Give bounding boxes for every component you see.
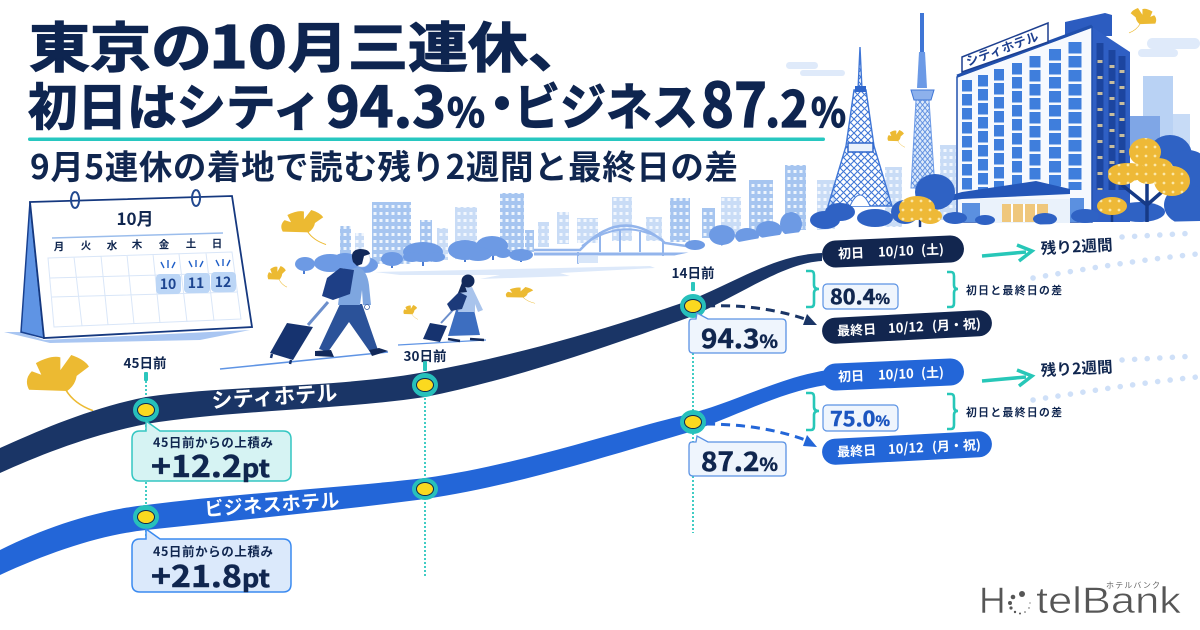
bridge: [534, 226, 700, 264]
title: %: [447, 81, 485, 139]
weekday labels: 土: [186, 236, 197, 251]
traveller: man with suitcase: [220, 249, 388, 369]
title: [28, 1, 846, 145]
highlighted dates: [156, 259, 236, 294]
title: 87: [701, 56, 767, 145]
pill: city first day: (土): [921, 239, 944, 259]
callout: city hotel gain: 45日前からの上積み: [153, 432, 273, 451]
dotted continuation lines: [1033, 233, 1197, 400]
pill: city first day: 初日: [838, 242, 864, 262]
callout: city 94.3%: [689, 313, 786, 356]
logo: HotelBank: telBank: [1036, 580, 1182, 621]
pill: business last day: 10/12: [888, 437, 924, 458]
callout: city hotel gain: +12.2 pt: [151, 442, 270, 486]
golden ginkgo tree small left: [898, 196, 942, 228]
pill: city last day: 10/12: [888, 316, 924, 337]
background clouds: [786, 38, 1200, 76]
golden ginkgo tree small right: [1097, 197, 1127, 222]
brace and gap: business: 75.0%: [830, 403, 891, 432]
pill: business last day: [821, 431, 993, 465]
callout: city 94.3%: 94.3%: [701, 319, 778, 356]
timeline labels: 30日前: [404, 345, 446, 365]
title: .2: [765, 70, 808, 142]
logo: HotelBank: H: [979, 580, 1006, 621]
subtitle: 9月5連休の着地で読む残り2週間と最終日の差: [30, 140, 738, 189]
ribbon: city hotel: [0, 253, 822, 473]
highlighted dates: 11: [188, 273, 204, 293]
ribbon: business hotel: [0, 369, 835, 575]
vertical guide: 30 days before: [423, 361, 427, 576]
weekday labels: 金: [159, 237, 170, 252]
callout: business hotel gain: +21.8 pt: [151, 552, 270, 596]
brace and gap: business: [806, 393, 1062, 432]
trees around the hotel: [810, 135, 1200, 229]
ginkgo leaves: [27, 8, 1156, 411]
timeline labels: 14日前: [672, 262, 714, 282]
ribbon label: city hotel: シティホテル: [211, 377, 338, 415]
callout: business hotel gain: 45日前からの上積み: [153, 541, 273, 560]
weekday labels: 日: [212, 236, 222, 251]
pill: city last day: [821, 310, 993, 344]
weekday labels: 火: [81, 238, 92, 253]
title: 東京の: [29, 4, 212, 83]
pill: business first day: [822, 358, 965, 391]
brace and gap: city: 初日と最終日の差: [966, 282, 1062, 298]
callout: business 87.2%: 87.2%: [701, 442, 778, 479]
trees behind the skyline: [295, 212, 802, 274]
pill: business last day: (月・祝): [931, 434, 981, 456]
callout: business hotel gain: [132, 529, 291, 596]
title: 月三連休、: [288, 4, 588, 83]
brace and gap: city: 80.4%: [830, 281, 891, 310]
weekday labels: [54, 236, 222, 254]
icon: Tokyo Tower: [828, 47, 892, 206]
pill: business first day: 初日: [838, 365, 864, 385]
traveller: woman with suitcase: [398, 274, 486, 345]
weekday labels: 月: [54, 239, 64, 254]
icon: desk calendar: [4, 190, 252, 343]
pill: city last day: (月・祝): [931, 313, 981, 335]
callout: city hotel gain: [132, 421, 291, 486]
title: %: [811, 81, 846, 139]
ribbon label: business hotel: ビジネスホテル: [204, 486, 340, 522]
timeline labels: 45日前: [124, 352, 166, 372]
weekday labels: 水: [107, 238, 118, 253]
icon: city hotel building: [948, 13, 1130, 223]
arrow and label: city remaining two weeks: [982, 233, 1113, 261]
callout: business 87.2%: [689, 436, 786, 479]
highlighted dates: 12: [215, 272, 231, 292]
dashed arrow: business first to last day: [706, 424, 817, 447]
title: 94.3: [326, 63, 446, 144]
icon: Tokyo Skytree: [911, 13, 935, 188]
title: 初日はシティ: [28, 68, 322, 140]
brace and gap: business: 初日と最終日の差: [966, 404, 1062, 420]
brace and gap: city: [806, 271, 1062, 310]
pill: business first day: (土): [921, 362, 944, 382]
skyline buildings: [340, 76, 1190, 266]
pill: city last day: 最終日: [837, 319, 877, 340]
arrow and label: business remaining two weeks: [982, 355, 1113, 386]
vertical guide: 45 days before: [144, 372, 148, 538]
arrow and label: business remaining two weeks: 残り2週間: [1040, 355, 1113, 381]
vertical guide: 14 days before: [691, 282, 695, 533]
title: 10: [209, 1, 287, 85]
pill: city first day: [822, 235, 965, 268]
golden ginkgo tree large: [1108, 138, 1190, 222]
title rule: [28, 138, 825, 141]
ground: [0, 221, 1200, 630]
arrow and label: city remaining two weeks: 残り2週間: [1040, 233, 1113, 259]
highlighted dates: 10: [160, 274, 176, 294]
dashed arrow: city first to last day: [706, 306, 817, 325]
title: ・: [477, 65, 527, 137]
calendar month: 10月: [116, 205, 154, 230]
title: ビジネス: [514, 68, 698, 140]
hotel sign: シティホテル: [963, 26, 1041, 70]
pill: business last day: 最終日: [837, 440, 877, 461]
logo: HotelBank: [979, 580, 1182, 621]
logo: HotelBank: ホテルバンク: [1106, 580, 1160, 591]
pill: city first day: 10/10: [878, 240, 914, 261]
pill: business first day: 10/10: [878, 363, 914, 384]
timeline labels: [124, 262, 714, 372]
river: [375, 266, 655, 279]
weekday labels: 木: [132, 237, 143, 252]
timeline markers: [133, 294, 706, 529]
